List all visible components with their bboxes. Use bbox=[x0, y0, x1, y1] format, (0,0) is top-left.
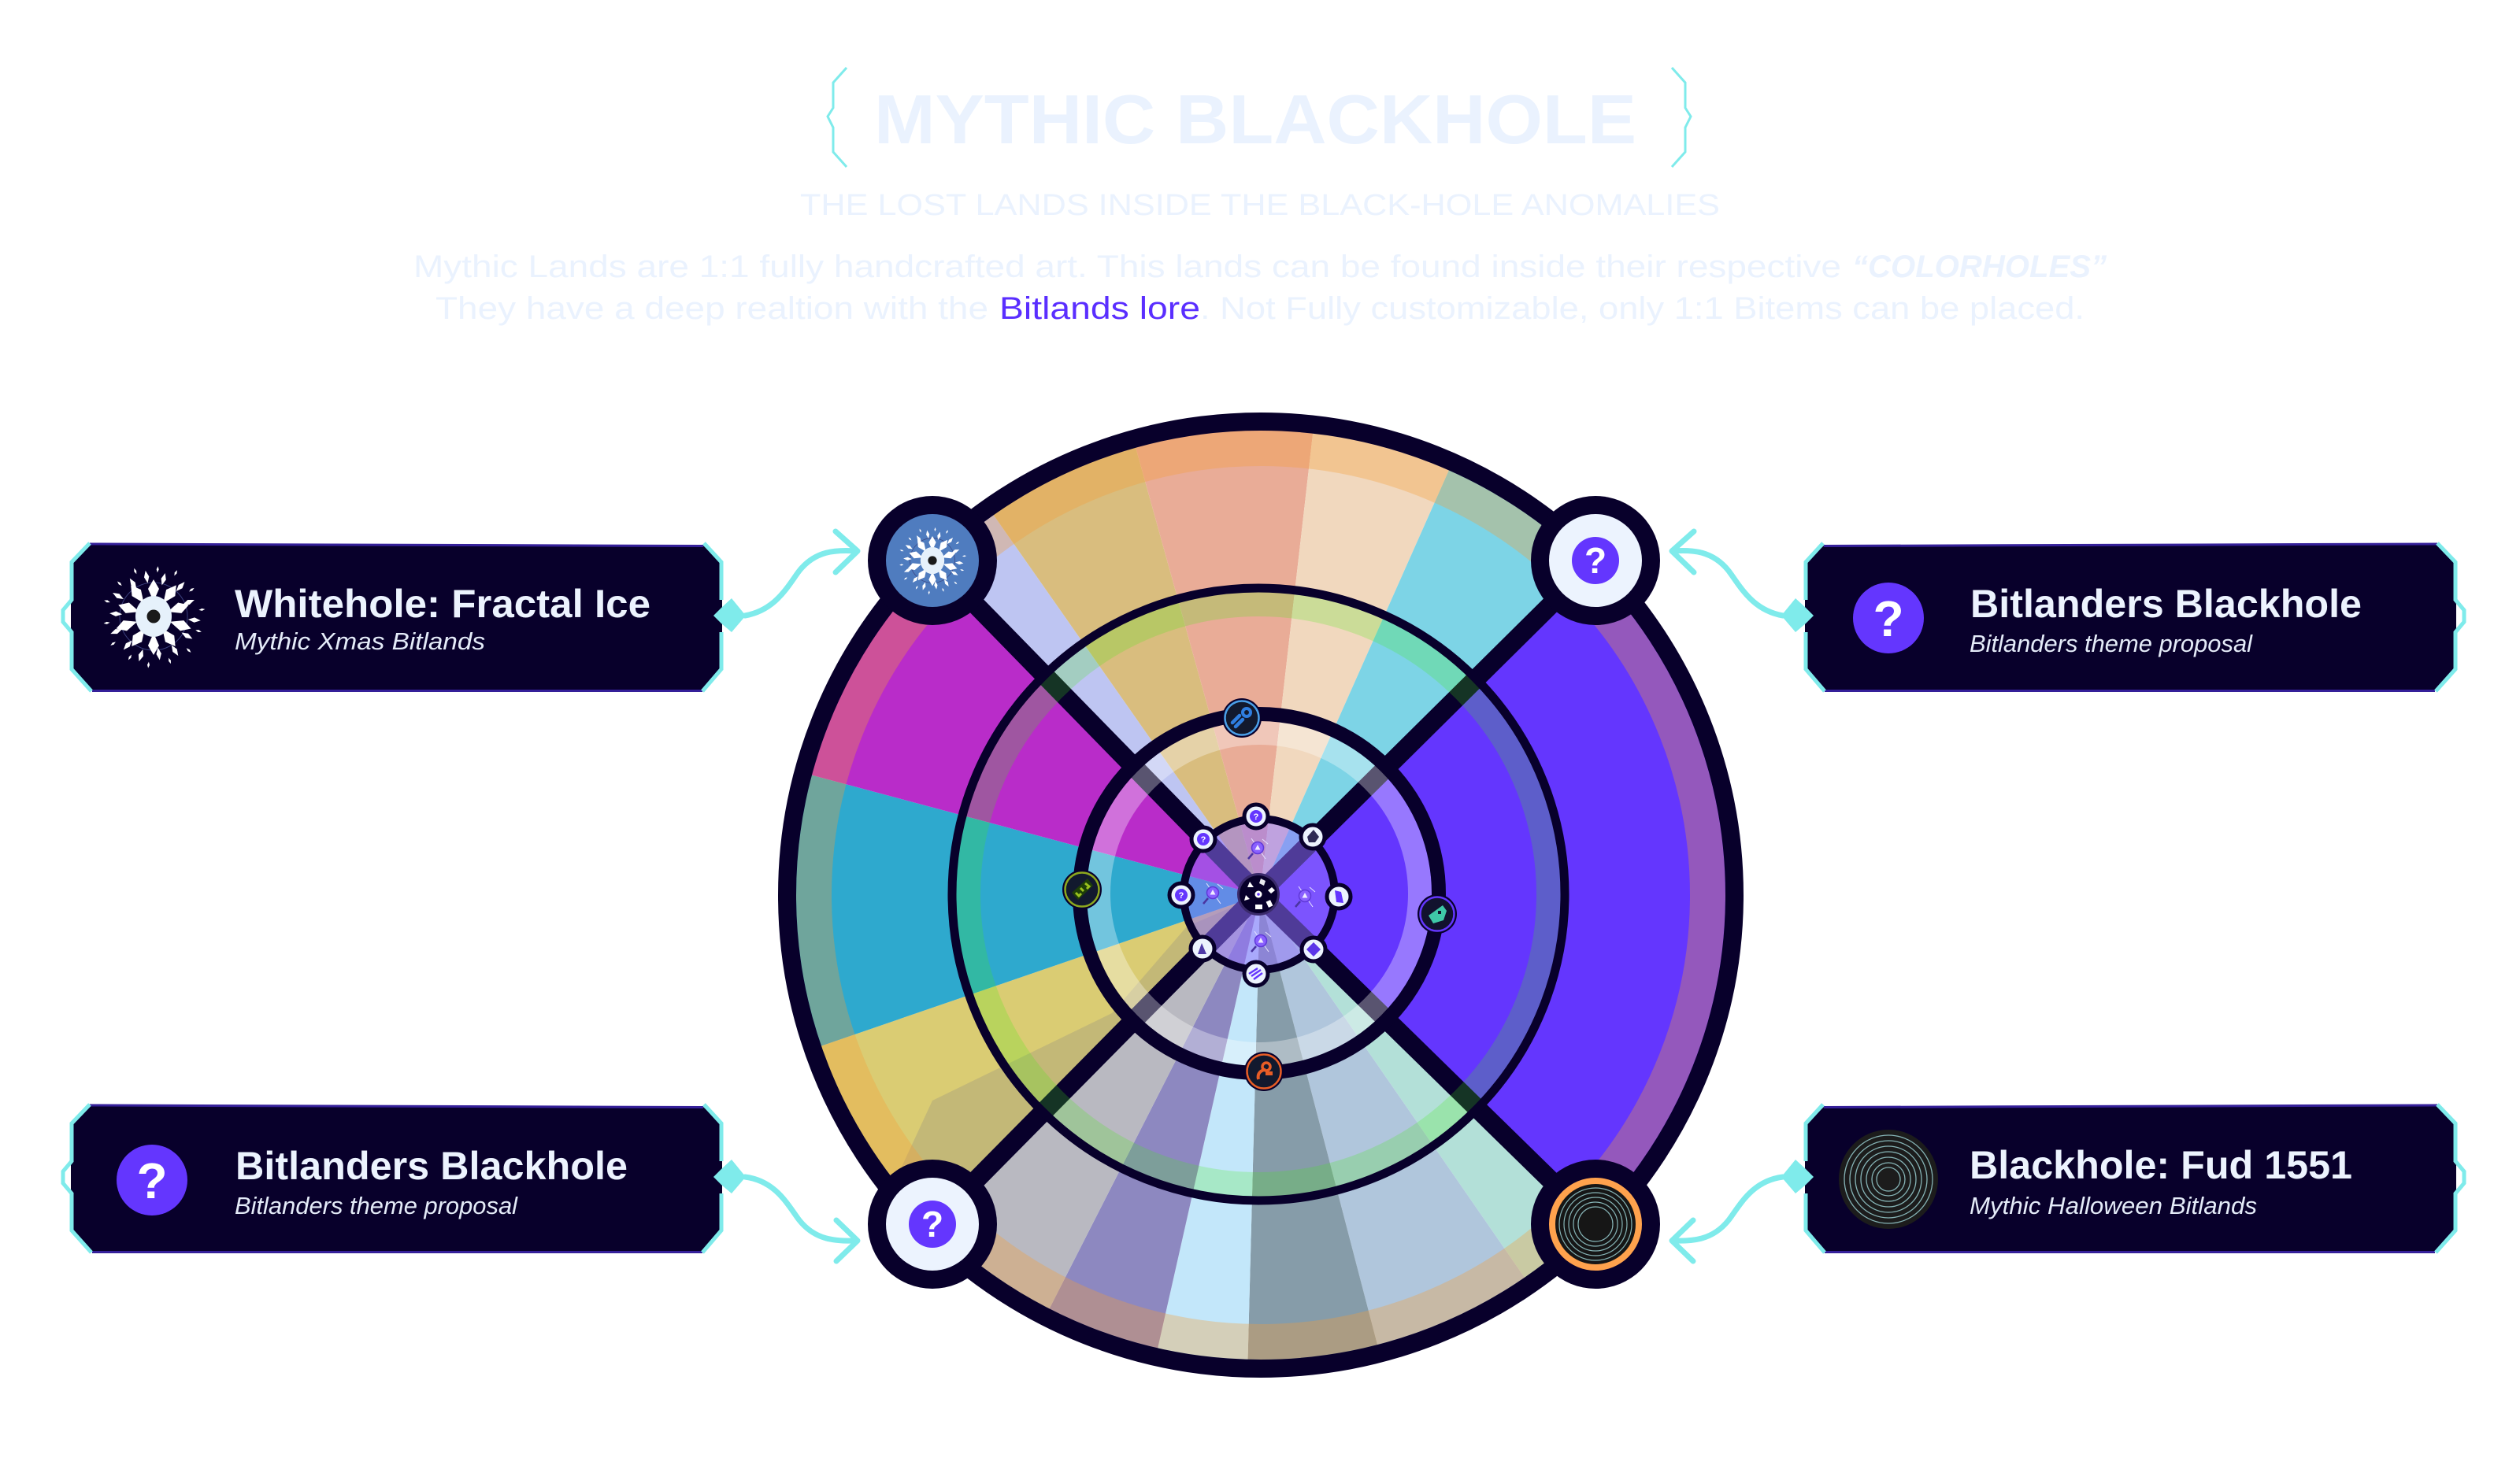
caption: Bitlanders theme proposal bbox=[235, 1192, 518, 1219]
caption: Mythic Xmas Bitlands bbox=[235, 627, 485, 655]
heading: Bitlanders Blackhole bbox=[235, 1144, 628, 1188]
node: whitehole fractal ice bbox=[868, 496, 997, 625]
ring node: orange bbox=[1244, 1052, 1284, 1091]
intro paragraph: Bitlands lore bbox=[999, 291, 1200, 326]
hub ring bbox=[1184, 819, 1335, 970]
panel: whitehole fractal ice bbox=[63, 531, 858, 691]
middle green band bbox=[969, 605, 1548, 1184]
hub nodes bbox=[1169, 805, 1351, 986]
title: Mythic Blackhole: MYTHIC BLACKHOLE bbox=[874, 80, 1636, 158]
panel: bitlanders blackhole top right bbox=[1672, 531, 2464, 691]
caption: Bitlanders theme proposal bbox=[1970, 630, 2253, 657]
arrow to top right node bbox=[1672, 531, 1783, 616]
icon: question bbox=[117, 1145, 187, 1215]
node: fud blackhole bbox=[1531, 1160, 1660, 1289]
intro paragraph bbox=[413, 250, 2107, 326]
intro paragraph: . Not Fully customizable, only 1:1 Bitems can be placed. bbox=[1200, 291, 2085, 326]
central hub bbox=[1237, 873, 1280, 916]
ring node: blue bbox=[1222, 698, 1262, 738]
intro paragraph: Mythic Lands are 1:1 fully handcrafted art. This lands can be found inside their respective bbox=[413, 250, 1841, 284]
arrow to fractal ice node bbox=[745, 531, 858, 616]
bulb icons in hub bbox=[1203, 838, 1315, 952]
outer orange band bbox=[814, 449, 1707, 1341]
inner white band bbox=[1099, 733, 1420, 1054]
arrow to fud node bbox=[1672, 1177, 1783, 1261]
heading: Whitehole: Fractal Ice bbox=[235, 582, 650, 626]
colored land wedges bbox=[796, 431, 1725, 1360]
ring node: teal bbox=[1418, 894, 1457, 934]
heading: Bitlanders Blackhole bbox=[1970, 582, 2362, 626]
subtitle: THE LOST LANDS INSIDE THE BLACK-HOLE ANOMALIES bbox=[800, 189, 1720, 222]
panel: blackhole fud 1551 bbox=[1672, 1104, 2464, 1261]
icon: question bbox=[1853, 583, 1924, 653]
middle ring bbox=[952, 588, 1565, 1201]
icon: fractal ice bbox=[103, 566, 206, 668]
outer ring bbox=[788, 422, 1734, 1368]
intro paragraph: They have a deep realtion with the bbox=[435, 291, 988, 326]
caption: Mythic Halloween Bitlands bbox=[1970, 1192, 2257, 1219]
heading: Blackhole: Fud 1551 bbox=[1970, 1143, 2352, 1187]
inner ring bbox=[1080, 714, 1439, 1073]
icon: question: ? bbox=[136, 1153, 168, 1209]
node: bitlanders blackhole bottom left bbox=[868, 1160, 997, 1289]
icon: question: ? bbox=[1873, 590, 1904, 647]
icon: fud blackhole bbox=[1839, 1130, 1938, 1229]
intro paragraph: “COLORHOLES” bbox=[1852, 250, 2107, 284]
arrow to bottom left node bbox=[745, 1177, 858, 1261]
ring node: green bbox=[1062, 870, 1102, 909]
hub purple disc bbox=[1187, 822, 1332, 967]
spokes bbox=[932, 561, 1595, 1224]
node: bitlanders blackhole top right bbox=[1531, 496, 1660, 625]
title left bracket bbox=[828, 68, 847, 167]
title right bracket bbox=[1672, 68, 1691, 167]
panel: bitlanders blackhole bottom left bbox=[63, 1104, 858, 1261]
blackhole wheel bbox=[778, 413, 1744, 1378]
